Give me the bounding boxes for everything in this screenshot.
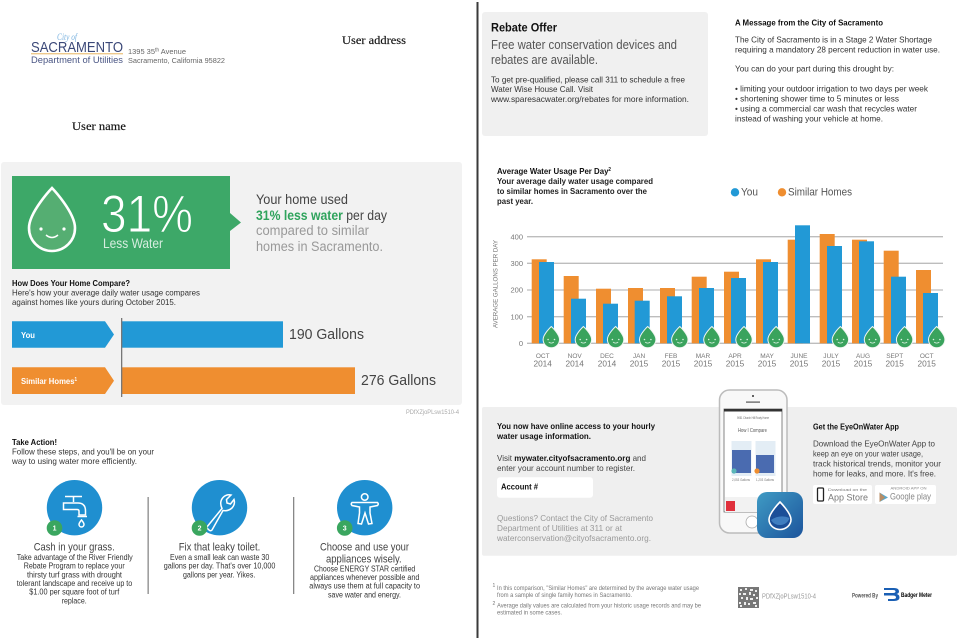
year labels: 2014: [565, 359, 584, 369]
year labels: [533, 359, 936, 369]
chart heading: average water usage per day: Average Water Usage Per Day: [497, 166, 618, 176]
text: online access: water usage information.: [496, 431, 591, 441]
footnotes: 2: [492, 601, 496, 607]
text: EyeOnWater app: Download the EyeOnWater App to: [813, 439, 935, 449]
text: EyeOnWater app: home for leaks, and more. It's free.: [813, 468, 936, 478]
text block: message from the city: • shortening shower time to 5 minutes or less: [735, 94, 899, 104]
step 3: choose and use appliances: appliances wisely.: [326, 553, 402, 565]
step 2: fix that leaky toilet: gallons per year. Yikes.: [183, 570, 255, 579]
step 1: cash in your grass: thirsty turf grass with drought: [27, 570, 123, 579]
step 1: cash in your grass: 1: [53, 526, 57, 532]
footnotes: from a sample of single family homes in Sacramento.: [497, 592, 632, 599]
footnotes: estimated in some cases.: [497, 609, 562, 616]
phone illustration: 2,053 Gallons: [732, 478, 750, 482]
step 3: choose and use appliances: [309, 480, 421, 599]
panel: rebate offer: rebates are available.: [491, 53, 598, 67]
callout statement: Your home used: [256, 192, 348, 207]
step 2: fix that leaky toilet: 2: [198, 526, 202, 532]
year labels: 2015: [822, 359, 841, 369]
text block: message from the city: requiring a mandatory 28 percent reduction in water use.: [735, 44, 940, 54]
year labels: 2015: [694, 359, 713, 369]
phone illustration: [720, 390, 787, 533]
text block: message from the city: You can do your part during this drought by:: [735, 64, 894, 74]
chart heading: average water usage per day: Your average daily water usage compared: [497, 176, 653, 186]
icon: wrench: [206, 495, 234, 531]
month labels: [536, 353, 934, 360]
logo: City of Sacramento Department of Utilities: SACRAMENTO: [31, 39, 123, 56]
callout statement: 31% less water per day: [256, 208, 387, 223]
text: contact: waterconservation@cityofsacramento.org.: [496, 533, 651, 543]
step 1: cash in your grass: replace.: [62, 596, 87, 605]
badge: Google Play: [875, 485, 936, 504]
text: EyeOnWater app: keep an eye on your water usage,: [813, 449, 923, 459]
text: online access: You now have online access to your hourly: [497, 421, 655, 431]
year labels: 2015: [726, 359, 745, 369]
callout statement: [256, 192, 387, 254]
month labels: MAY: [760, 353, 774, 360]
app icon: [757, 492, 803, 538]
heading: how does your home compare: How Does Your Home Compare?: [12, 278, 130, 288]
step 2: fix that leaky toilet: [164, 480, 276, 579]
chart legend: [731, 186, 852, 198]
phone illustration: How I Compare: [738, 428, 767, 434]
sender address: Sacramento, California 95822: [128, 56, 225, 65]
account code: PDfXZjoPLsw1510-4: [406, 410, 460, 416]
bar: you: 190 Gallons: [289, 327, 364, 343]
month labels: OCT: [536, 353, 550, 360]
panel: rebate offer: Free water conservation devices and: [491, 38, 677, 52]
y axis labels: 100: [510, 312, 523, 321]
heading: take action: [11, 437, 154, 466]
text block: message from the city: A Message from the City of Sacramento: [735, 18, 883, 28]
text: online access: Visit mywater.cityofsacramento.org and: [497, 453, 646, 463]
user name: User name: [72, 119, 126, 133]
year labels: 2015: [758, 359, 777, 369]
logo: City of Sacramento Department of Utilities: City of: [57, 32, 78, 43]
badge: Google Play: ANDROID APP ON: [890, 486, 927, 490]
sender address: [128, 47, 225, 65]
step 3: choose and use appliances: appliances whenever possible and: [310, 573, 419, 582]
year labels: 2015: [790, 359, 809, 369]
text block: message from the city: The City of Sacramento is in a Stage 2 Water Shortage: [735, 34, 932, 44]
chart heading: average water usage per day: 2: [608, 167, 611, 173]
heading: how does your home compare: against homes like yours during October 2015.: [12, 297, 176, 307]
text: online access: [496, 421, 655, 473]
bar: similar homes: 1: [74, 377, 77, 383]
year labels: 2015: [885, 359, 904, 369]
smiling drop markers: [543, 326, 945, 348]
bar: you: [12, 321, 364, 348]
chart heading: average water usage per day: past year.: [497, 196, 533, 206]
month labels: MAR: [696, 353, 711, 360]
chart legend: You: [741, 186, 758, 198]
footnotes: 1: [492, 583, 496, 589]
step 3: choose and use appliances: save water and energy.: [328, 590, 401, 599]
text block: message from the city: • using a commercial car wash that recycles water: [735, 104, 917, 114]
heading: how does your home compare: [12, 278, 200, 307]
panel: rebate offer: [482, 12, 708, 136]
panel: online access and app: [482, 390, 957, 556]
step 1: cash in your grass: $1.00 per square foot of turf: [29, 588, 120, 597]
orange bars: similar homes: [532, 234, 931, 343]
sender address: th: [155, 48, 159, 54]
callout statement: compared to similar: [256, 223, 369, 238]
badge: App Store: Download on the: [828, 487, 868, 492]
text: contact: Questions? Contact the City of Sacramento: [497, 513, 653, 523]
month labels: SEPT: [886, 353, 903, 360]
step 1: cash in your grass: tolerant landscape and receive up to: [17, 579, 133, 588]
icon: faucet: [64, 496, 87, 527]
bar: similar homes: 276 Gallons: [361, 373, 436, 389]
month labels: AUG: [856, 353, 870, 360]
y axis labels: [510, 232, 523, 348]
month labels: FEB: [665, 353, 677, 360]
text: EyeOnWater app: [813, 422, 941, 478]
y axis title: AVERAGE GALLONS PER DAY: [492, 239, 500, 328]
step 1: cash in your grass: Take advantage of the River Friendly: [17, 553, 133, 562]
text: EyeOnWater app: Get the EyeOnWater App: [813, 422, 899, 432]
badge: Google Play: Google play: [890, 492, 931, 503]
sender address: Avenue: [159, 47, 186, 56]
y axis labels: 200: [510, 286, 523, 295]
phone illustration: 1,203 Gallons: [756, 478, 774, 482]
footnotes: In this comparison, "Similar Homes" are determined by the average water usage: [497, 585, 699, 592]
year labels: 2015: [854, 359, 873, 369]
logo: Badger Meter: [884, 588, 933, 601]
powered by label: Powered By: [852, 593, 878, 599]
badge: App Store: App Store: [828, 492, 868, 503]
year labels: 2015: [630, 359, 649, 369]
y axis labels: 300: [510, 259, 523, 268]
step 1: cash in your grass: Rebate Program to replace your: [24, 562, 125, 571]
year labels: 2015: [917, 359, 936, 369]
panel: rebate offer: www.sparesacwater.org/rebates for more information.: [490, 94, 689, 104]
sender address: 1395 35: [128, 47, 155, 56]
step 3: choose and use appliances: 3: [343, 526, 347, 532]
icon: person: [351, 494, 378, 524]
bar: you: You: [21, 330, 35, 340]
account number box: [497, 477, 593, 498]
panel: home comparison: [1, 162, 462, 405]
step 3: choose and use appliances: Choose and use your: [320, 542, 409, 554]
user address: User address: [342, 33, 406, 47]
chart heading: average water usage per day: [497, 166, 653, 206]
step 2: fix that leaky toilet: gallons per day. That's over 10,000: [164, 562, 276, 571]
logo: City of Sacramento Department of Utilities: [31, 32, 124, 65]
chart legend: Similar Homes: [788, 186, 852, 198]
text: contact: [496, 513, 653, 543]
month labels: DEC: [600, 353, 614, 360]
text: online access: enter your account number to register.: [497, 463, 635, 473]
y axis labels: 400: [510, 232, 523, 242]
step 3: choose and use appliances: Choose ENERGY STAR certified: [314, 564, 415, 573]
panel: rebate offer: To get pre-qualified, please call 311 to schedule a free: [491, 74, 685, 84]
panel: rebate offer: Water Wise House Call. Visit: [491, 84, 594, 94]
bar: similar homes: Similar Homes: [21, 376, 80, 386]
logo: Badger Meter: Badger Meter: [901, 593, 933, 599]
heading: take action: Follow these steps, and you'll be on your: [12, 446, 154, 456]
footnotes: [492, 583, 701, 616]
step 1: cash in your grass: [17, 480, 133, 605]
month labels: JAN: [633, 353, 645, 360]
panel: rebate offer: Rebate Offer: [491, 20, 557, 34]
bar chart: monthly gallons per day: [492, 225, 945, 369]
chart heading: average water usage per day: to similar homes in Sacramento over the: [497, 186, 647, 196]
QR code: [738, 587, 759, 608]
step 1: cash in your grass: Cash in your grass.: [34, 542, 115, 554]
text block: message from the city: [735, 18, 940, 123]
green callout: 31% less water: [12, 176, 241, 269]
month labels: JUNE: [791, 353, 808, 360]
account number box: Account #: [501, 482, 538, 492]
blue bars: you: [539, 225, 938, 343]
text block: message from the city: • limiting your outdoor irrigation to two days per week: [735, 84, 929, 94]
phone illustration: 9051 Church Hill Rusty Home: [737, 416, 769, 420]
text: contact: Department of Utilities at 311 or at: [497, 523, 623, 533]
month labels: NOV: [568, 353, 582, 360]
month labels: OCT: [920, 353, 934, 360]
year labels: 2014: [533, 359, 552, 369]
text block: message from the city: instead of washing your vehicle at home.: [735, 113, 883, 123]
bar: similar homes: [12, 367, 436, 394]
green callout: 31% less water: Less Water: [103, 235, 163, 251]
step 3: choose and use appliances: always use them at full capacity to: [309, 582, 421, 591]
green callout: 31% less water: 31%: [101, 185, 193, 244]
page divider: [476, 2, 478, 638]
heading: take action: way to using water more efficiently.: [11, 456, 137, 466]
heading: take action: Take Action!: [12, 437, 57, 447]
text: EyeOnWater app: track historical trends, monitor your: [813, 459, 941, 469]
step 2: fix that leaky toilet: Even a small leak can waste 30: [170, 553, 270, 562]
badge: App Store: [813, 485, 872, 504]
QR code label: PDfXZjoPLsw1510-4: [762, 593, 816, 600]
y axis labels: 0: [519, 339, 523, 348]
heading: how does your home compare: Here's how your average daily water usage compares: [12, 288, 200, 298]
step 2: fix that leaky toilet: Fix that leaky toilet.: [179, 542, 260, 554]
callout statement: homes in Sacramento.: [256, 239, 383, 254]
footnotes: Average daily values are calculated from your historic usage records and may be: [497, 603, 701, 610]
month labels: APR: [728, 353, 742, 360]
month labels: JULY: [823, 353, 839, 360]
year labels: 2014: [598, 359, 617, 369]
year labels: 2015: [662, 359, 681, 369]
logo: City of Sacramento Department of Utilities: Department of Utilities: [31, 55, 124, 65]
